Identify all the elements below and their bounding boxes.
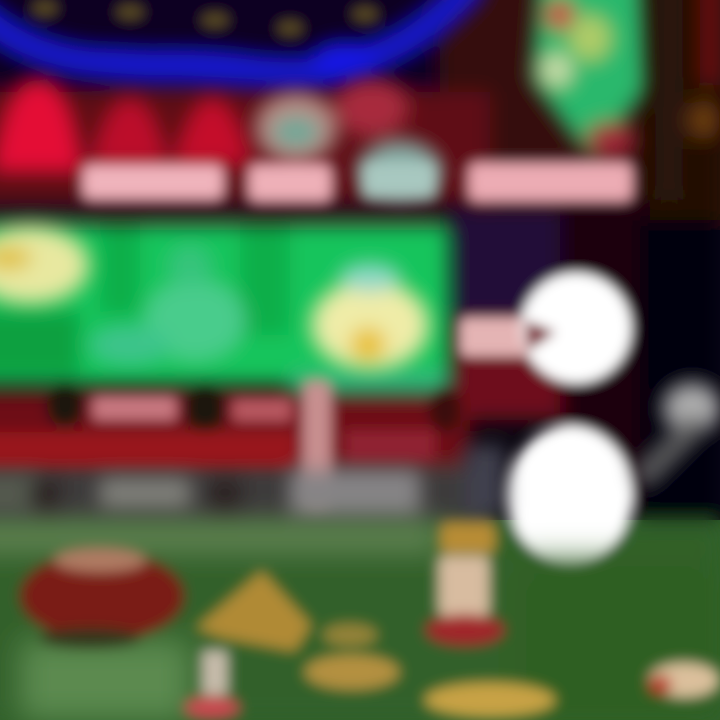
- grey strip: [0, 470, 420, 515]
- red arches: [0, 80, 252, 172]
- upper icons: [256, 80, 440, 198]
- football: [20, 548, 184, 648]
- green tree: [532, 0, 645, 160]
- small bottle: [184, 650, 240, 720]
- blue arc: [0, 0, 475, 81]
- far right glow: [655, 0, 720, 200]
- drink figure: [425, 522, 505, 646]
- gold snacks: [195, 570, 556, 718]
- field highlights: [0, 525, 720, 720]
- gold lights: [31, 0, 379, 36]
- grey side shape: [465, 384, 720, 515]
- lower red band: [0, 380, 461, 510]
- right snack: [648, 662, 720, 698]
- pale label blocks: [82, 162, 633, 202]
- cream emblems: [0, 227, 428, 369]
- white circles: [460, 273, 632, 564]
- green panel: [0, 224, 450, 394]
